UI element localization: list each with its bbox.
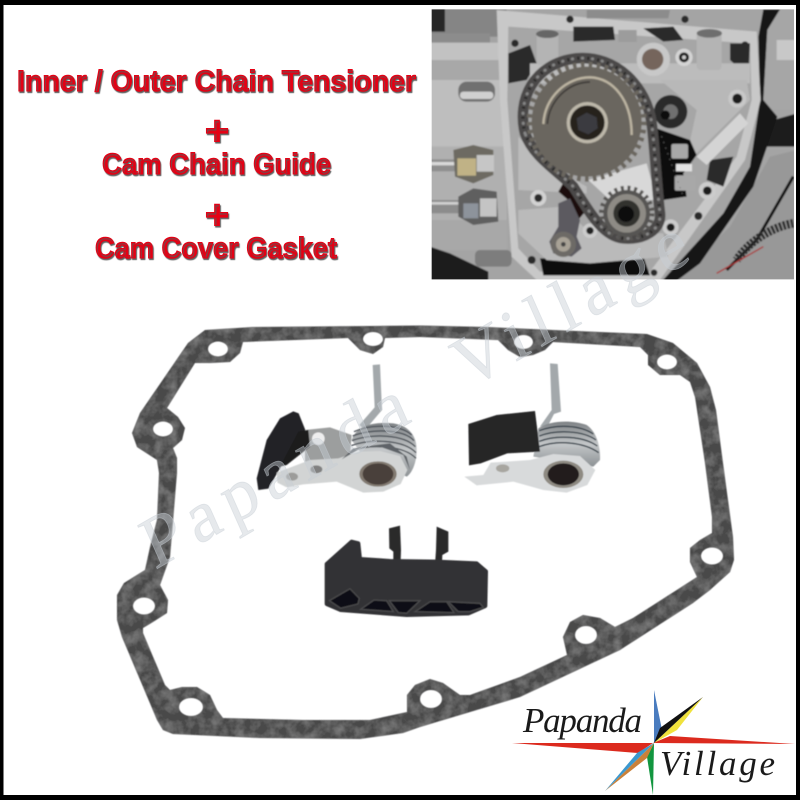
watermark: Papanda Village — [129, 196, 707, 585]
rivets — [286, 473, 298, 481]
spring coil — [533, 422, 600, 467]
black pad — [468, 411, 540, 465]
guide body — [327, 542, 486, 615]
black oil area — [653, 128, 697, 200]
logo: Papanda Village — [512, 690, 795, 795]
small crank sprocket — [601, 188, 652, 239]
front arm — [464, 454, 595, 493]
frame openings — [508, 10, 750, 276]
line: cam chain guide: Cam Chain Guide — [102, 148, 331, 181]
gasket — [117, 326, 734, 739]
chain — [523, 58, 660, 239]
spring coil — [351, 423, 417, 477]
bushing — [543, 461, 583, 488]
logo word: Village: Village — [660, 744, 775, 783]
rivet — [496, 464, 509, 472]
plus sign 1: + — [205, 107, 229, 154]
photo: installed cam chain in engine — [430, 7, 797, 283]
plus sign 2: + — [205, 191, 229, 238]
large cam sprocket — [529, 64, 644, 179]
black pad — [257, 411, 305, 490]
line: inner outer chain tensioner: Inner / Outer Chain Tensioner — [17, 65, 416, 98]
spring wire — [540, 363, 561, 427]
line: cam cover gasket: Cam Cover Gasket — [95, 232, 337, 265]
wiring — [717, 177, 793, 273]
upper housing — [530, 29, 750, 165]
logo word: Papanda: Papanda — [522, 701, 642, 740]
heading: kit contents — [17, 65, 416, 265]
guide tabs — [389, 526, 448, 580]
guide openings — [329, 589, 483, 613]
bushing — [359, 461, 397, 487]
spring wire — [359, 364, 382, 430]
cam chain guide — [327, 526, 486, 615]
lower housing — [518, 137, 716, 263]
right tensioner — [464, 363, 600, 493]
left tensioner — [257, 364, 417, 493]
cover frame — [497, 10, 761, 280]
fittings — [430, 145, 498, 225]
tensioner in engine — [549, 183, 587, 257]
rear arm — [305, 427, 352, 465]
engine left background — [430, 7, 512, 283]
logo star — [512, 690, 795, 795]
right background — [660, 9, 797, 283]
front arm — [277, 451, 407, 493]
